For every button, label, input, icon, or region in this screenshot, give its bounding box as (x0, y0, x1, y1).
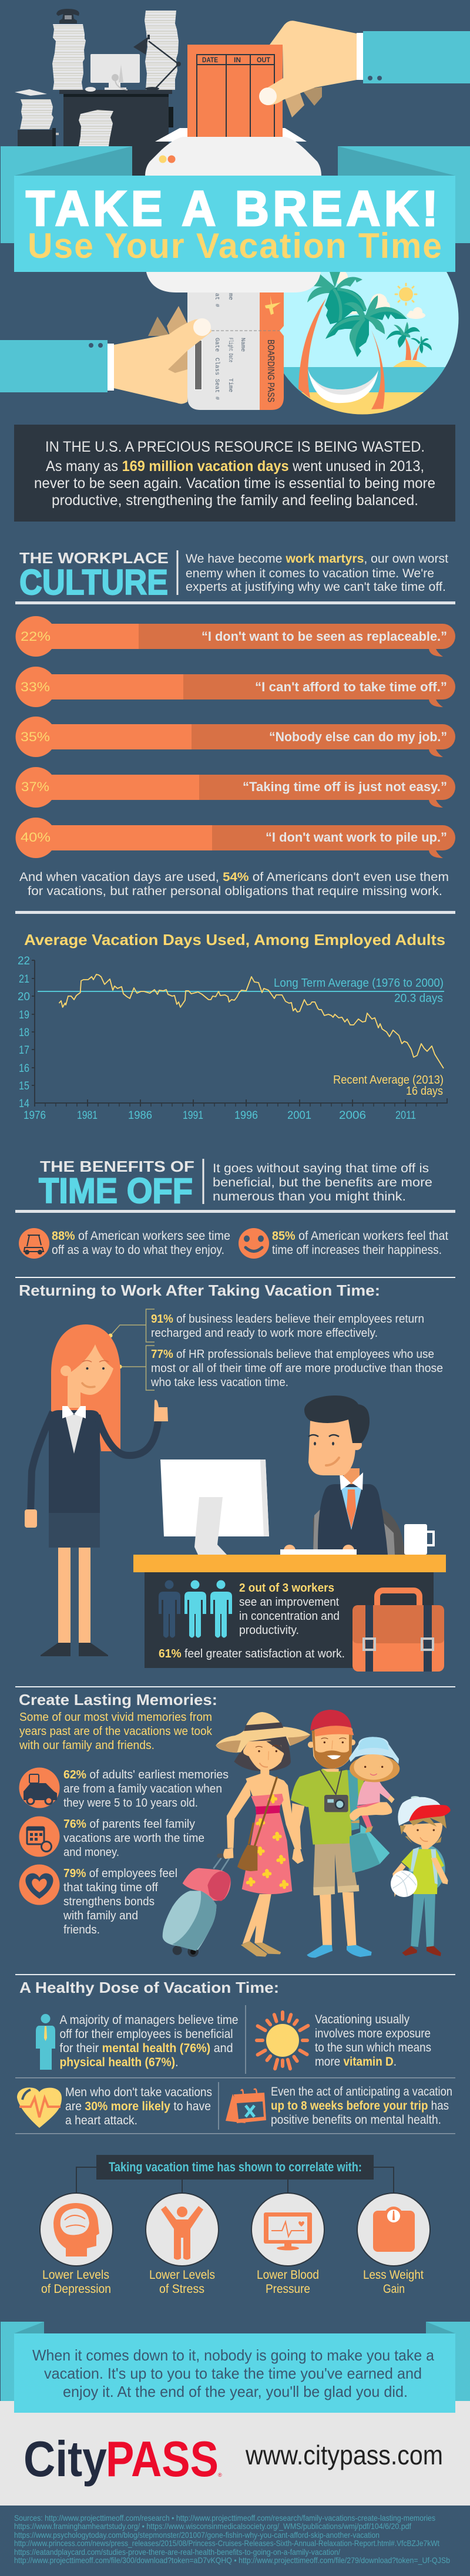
legs (320, 1892, 357, 1947)
closing banner: When it comes down to it, nobody is going to make you take a (32, 2346, 435, 2364)
jacket (49, 1410, 100, 1513)
icon: brain head (40, 2193, 113, 2266)
text: 85 percent (272, 1229, 448, 1257)
hair (304, 1395, 370, 1443)
text: managers: A majority of managers believe time (60, 2013, 239, 2027)
label: stress (149, 2268, 215, 2296)
text: 76 percent: vacations are worth the time (63, 1832, 204, 1845)
text: vitamin D: more vitamin D. (315, 2055, 397, 2069)
x axis labels: 1996 (234, 1109, 258, 1122)
monitor (90, 54, 140, 90)
dress (242, 1794, 292, 1894)
banner folds (1, 2322, 470, 2401)
chair (313, 1505, 405, 1555)
red cap (310, 1710, 354, 1737)
y axis labels: 17 (19, 1044, 29, 1057)
backpack (409, 1845, 445, 1892)
loose paper (15, 89, 47, 96)
text: 91 percent (151, 1313, 424, 1340)
blue hat (349, 1737, 399, 1764)
label: blood pressure: Pressure (266, 2282, 310, 2296)
face (61, 1344, 113, 1395)
text: 91 percent: 91% of business leaders believe their employees return (151, 1313, 424, 1326)
luggage (163, 1854, 234, 1957)
text: vitamin D: Vacationing usually (315, 2013, 409, 2026)
title banner (1, 146, 470, 272)
chest and neck (246, 1769, 285, 1796)
sleeve buttons (89, 343, 103, 348)
fingers behind ticket (148, 306, 187, 336)
icon: worker figures (159, 1580, 232, 1637)
closing banner: enjoy it. At the end of the year, you'll be glad you did. (63, 2383, 408, 2400)
text: 54 percent: for vacations, but rather personal obligations that require missing work. (28, 885, 442, 898)
heading: a healthy dose: A Healthy Dose of Vacation Time: (19, 1979, 279, 1996)
bar: 22 percent: 22% (21, 629, 51, 644)
text: vitamin D: involves more exposure (315, 2027, 431, 2040)
icon: heart rate monitor (251, 2193, 324, 2266)
desk lamp (133, 35, 181, 90)
heading: the benefits of time off: THE BENEFITS OF (40, 1158, 194, 1175)
paper stack front (79, 110, 113, 146)
text: 61 percent: 61% feel greater satisfaction at work. (159, 1647, 345, 1660)
pink top (357, 1780, 391, 1805)
icon: smiley (239, 1228, 269, 1259)
ticket stub (260, 292, 284, 410)
logo: CityPASS (24, 2432, 222, 2487)
icon: calendar (226, 2089, 266, 2123)
text: benefits intro: beneficial, but the benefits are more (213, 1176, 432, 1189)
sleeve (363, 31, 470, 83)
palm tree trunks (298, 298, 385, 409)
hammock (308, 369, 378, 403)
text: 62 percent (63, 1768, 229, 1810)
sun hat (216, 1712, 310, 1753)
x axis labels: 1976 (24, 1109, 46, 1122)
x axis labels: 2011 (395, 1109, 416, 1122)
sky, sea and sand (280, 272, 458, 415)
text: 76 percent: 76% of parents feel family (63, 1818, 195, 1831)
father's near arm (292, 1803, 304, 1849)
text: 77 percent (150, 1348, 443, 1389)
ticket fields: Flight Date (227, 338, 234, 362)
ticket fields: Seat # (213, 379, 220, 400)
text: 77 percent: who take less vacation time. (150, 1376, 288, 1389)
legs (243, 1894, 271, 1944)
text: benefits intro: It goes without saying that time off is (213, 1162, 429, 1175)
label: weight (363, 2268, 424, 2296)
sources (14, 2513, 450, 2565)
y axis labels: 20 (18, 991, 30, 1003)
face (402, 1822, 442, 1849)
panel: intro: productive, strengthening the family and feeling balanced. (52, 492, 418, 509)
panel: intro: As many as 169 million vacation days went unused in 2013, (46, 458, 424, 475)
subtitle: Use Your Vacation Time (28, 226, 443, 265)
heading: returning to work: Returning to Work After Taking Vacation Time: (19, 1282, 380, 1299)
callouts (108, 1309, 443, 1390)
heading: the benefits of time off: TIME OFF (39, 1171, 193, 1210)
y axis labels: 21 (19, 973, 29, 986)
recent average label (333, 1074, 444, 1098)
face (243, 1740, 284, 1771)
text: anticipating: up to 8 weeks before your trip has (271, 2099, 449, 2113)
text: 88 percent (52, 1229, 230, 1257)
text: heart attack: a heart attack. (65, 2114, 137, 2127)
sandals (241, 1941, 281, 1957)
long term label: 20.3 days (394, 992, 443, 1005)
sources: https://www.framinghamheartstudy.org/ • https://www.wisconsinmedicalsociety.org/_WMS/publications/wmj/pdf/104/6/20.pdf (14, 2521, 411, 2531)
x axis labels: 2006 (339, 1109, 366, 1122)
keyboard and hands (280, 1545, 357, 1556)
monitor back (160, 1459, 269, 1555)
ticket fields: me (227, 293, 233, 300)
y axis labels: 19 (19, 1009, 29, 1021)
text: 79 percent: that taking time off (63, 1881, 158, 1894)
ticket fields: Gate (213, 338, 220, 352)
label: weight: Less Weight (363, 2268, 424, 2282)
heading: the workplace culture: THE WORKPLACE (19, 549, 169, 567)
bar: 22 percent: “I don't want to be seen as replaceable.” (202, 629, 447, 644)
shirt and tie (341, 1487, 362, 1530)
text: heart attack (65, 2086, 212, 2127)
text: work martyrs: experts at justifying why we can't take time off. (186, 580, 446, 594)
panel: intro: never to be seen again. Vacation time is essential to being more (34, 475, 435, 492)
father (291, 1710, 390, 1958)
text: 79 percent: 79% of employees feel (63, 1867, 177, 1880)
dress flowers (246, 1794, 288, 1889)
text: work martyrs (186, 552, 448, 594)
printer back (155, 128, 307, 142)
boarding pass label: BOARDING PASS (266, 339, 276, 402)
text: 79 percent: strengthens bonds (63, 1895, 155, 1908)
y axis labels: 14 (19, 1098, 29, 1110)
panel: intro (14, 425, 455, 522)
chart title: Average Vacation Days Used, Among Employed Adults (24, 931, 445, 949)
icon: car (19, 1768, 60, 1808)
coffee mug (404, 1524, 434, 1555)
neck (322, 1769, 339, 1772)
desk (59, 90, 173, 176)
text: 62 percent: 62% of adults' earliest memories (63, 1768, 229, 1781)
curly hair (350, 1756, 400, 1782)
x axis labels: 1991 (183, 1109, 203, 1122)
hair (234, 1737, 291, 1771)
text: anticipating: positive benefits on mental health. (271, 2113, 441, 2127)
tote bag (350, 1825, 390, 1872)
paper stack small (20, 99, 53, 129)
recent average label: 16 days (406, 1085, 443, 1098)
cuff (357, 33, 363, 80)
sources: https://www.psychologytoday.com/blog/stepmonster/201007/gone-fishin-why-you-cant-afford-skip-another-vacation (14, 2530, 380, 2540)
text: 62 percent: are from a family vacation when (63, 1783, 222, 1795)
mother (216, 1712, 310, 1957)
text: 76 percent (63, 1818, 204, 1859)
website url: www.citypass.com (245, 2440, 443, 2470)
ticket fields (213, 293, 246, 400)
arms (227, 1778, 301, 1849)
text: 88 percent: 88% of American workers see time (52, 1229, 230, 1243)
collar (340, 1472, 363, 1490)
ticket fields: at # (213, 293, 220, 307)
text: 79 percent: with family and (63, 1909, 138, 1922)
long term label: Long Term Average (1976 to 2000) (274, 977, 444, 990)
island with small palms (386, 322, 432, 367)
sources: https://eatandplaycard.com/studies-prove-there-are-real-health-benefits-to-going-on-a-family-vacation/ (14, 2547, 340, 2557)
bar: 33 percent (15, 667, 455, 707)
text: 88 percent: off as a way to do what they enjoy. (52, 1243, 224, 1257)
hand (114, 319, 212, 404)
bottom hand (0, 306, 212, 404)
bar: 40 percent (15, 818, 455, 858)
icon: sun (257, 2012, 308, 2069)
pants (411, 1893, 435, 1947)
sleeve buttons (368, 76, 382, 80)
callout brackets (110, 1309, 155, 1390)
shirt (291, 1769, 364, 1845)
text: 2 out of 3 workers: 2 out of 3 workers (239, 1582, 334, 1595)
recent average label: Recent Average (2013) (333, 1074, 444, 1087)
icon: manager (36, 2014, 55, 2070)
long term average line (38, 991, 444, 992)
shoes (41, 1643, 108, 1656)
x axis labels (24, 1109, 416, 1122)
ticket dashes (207, 330, 280, 331)
arms (392, 1858, 448, 1897)
heading: create lasting memories: Create Lasting Memories: (19, 1691, 217, 1709)
text: memories intro: with our family and friends. (19, 1739, 155, 1752)
palm fronds (307, 270, 407, 357)
text: managers: physical health (67%). (60, 2056, 179, 2069)
icon: golf cart (19, 1228, 49, 1259)
boarding pass (187, 292, 284, 410)
text: 54 percent: And when vacation days are used, 54% of Americans don't even use them (19, 870, 449, 884)
bar: 40 percent: 40% (21, 830, 51, 845)
bar: 22 percent (15, 616, 455, 657)
text: benefits intro: numerous than you might think. (213, 1190, 406, 1203)
paper stack right (145, 11, 179, 90)
text: memories intro (19, 1711, 213, 1752)
shirt (65, 1415, 83, 1454)
axes (32, 960, 448, 1107)
bag strap (348, 1770, 360, 1831)
y axis labels (18, 955, 30, 1110)
logo: CityPASS: City (24, 2432, 107, 2487)
time card: OUT (257, 56, 271, 64)
volleyball (391, 1871, 417, 1897)
woman illustration (25, 1324, 168, 1656)
text: 85 percent: time off increases their happiness. (272, 1243, 442, 1257)
white and red cap (398, 1796, 451, 1825)
hand (388, 1795, 395, 1803)
face (308, 1420, 362, 1475)
label: depression (41, 2268, 111, 2296)
label: blood pressure (257, 2268, 319, 2296)
ticket fields: Name (239, 338, 246, 352)
left hand (25, 1509, 37, 1528)
icon: stretching person (146, 2193, 219, 2266)
closing banner: vacation. It's up to you to take the time you've earned and (44, 2365, 422, 2382)
bar: 33 percent: 33% (21, 680, 50, 694)
bar: 37 percent (15, 767, 455, 808)
text: 62 percent: they were 5 to 10 years old. (63, 1797, 198, 1810)
skirt (49, 1513, 100, 1548)
face (354, 1754, 393, 1780)
label: blood pressure: Lower Blood (257, 2268, 319, 2282)
text: work martyrs: We have become work martyrs, our own worst (186, 552, 448, 566)
text: 2 out of 3 workers: in concentration and (239, 1610, 340, 1623)
text: 91 percent: recharged and ready to work more effectively. (151, 1327, 378, 1340)
man illustration (304, 1395, 405, 1555)
jacket (318, 1484, 388, 1555)
time card: DATE (202, 56, 218, 64)
text: 79 percent (63, 1867, 177, 1936)
ticket fields: Class (213, 358, 220, 375)
daughter (349, 1737, 400, 1833)
bar: 37 percent: 37% (21, 779, 49, 794)
camera (320, 1770, 348, 1812)
text: 2 out of 3 workers: productivity. (239, 1624, 299, 1637)
long term label (274, 977, 444, 1005)
office illustration (15, 9, 181, 176)
panel: intro: IN THE U.S. A PRECIOUS RESOURCE IS BEING WASTED. (45, 439, 425, 455)
text: 76 percent: and money. (63, 1846, 119, 1859)
beach scene (280, 272, 458, 415)
label: stress: of Stress (159, 2282, 204, 2296)
icon: suitcase (352, 1590, 444, 1672)
icon: calendar and coin (19, 1816, 60, 1857)
time card: IN (234, 56, 241, 64)
cuff (108, 344, 114, 391)
text: managers: off for their employees is beneficial (60, 2027, 233, 2041)
icon: plane (265, 295, 281, 315)
closing banner (1, 2322, 470, 2413)
sneakers (402, 1946, 441, 1956)
line chart (18, 955, 448, 1122)
bar: 33 percent: “I can't afford to take time off.” (255, 680, 447, 694)
icon: heart with pulse (17, 2087, 62, 2128)
ticket fields: Time (227, 378, 234, 392)
title: TAKE A BREAK! (26, 181, 442, 236)
y axis labels: 16 (19, 1062, 29, 1075)
logo: CityPASS: ® (218, 2472, 222, 2478)
y axis labels: 18 (19, 1027, 29, 1039)
desk (133, 1555, 446, 1668)
text: 2 out of 3 workers (239, 1582, 340, 1637)
legs (58, 1545, 90, 1643)
backpack straps (410, 1847, 438, 1884)
text: 79 percent: friends. (63, 1923, 100, 1936)
bar: 35 percent (15, 717, 455, 757)
hair (51, 1324, 120, 1451)
text: vitamin D: to the sun which means (315, 2041, 431, 2054)
hair (400, 1815, 446, 1843)
family illustration (163, 1710, 451, 1958)
x axis labels: 2001 (287, 1109, 311, 1122)
text: memories intro: years past are of the vacations we took (19, 1725, 213, 1738)
right arm (97, 1415, 158, 1455)
text: vitamin D (315, 2013, 431, 2069)
connectors (76, 2167, 394, 2193)
text: 85 percent: 85% of American workers feel that (272, 1229, 448, 1243)
barcode (194, 340, 202, 390)
mouse (85, 87, 96, 92)
bar: 40 percent: “I don't want work to pile up.” (266, 830, 447, 845)
sleeve (0, 340, 108, 392)
text: managers (60, 2013, 239, 2069)
text: anticipating (271, 2085, 452, 2127)
collar (62, 1406, 86, 1418)
heading: the workplace culture: CULTURE (19, 563, 168, 602)
top hand (259, 21, 470, 105)
icon: telephone (56, 9, 79, 23)
x axis labels: 1986 (128, 1109, 152, 1122)
clouds (334, 270, 425, 319)
label: depression: Lower Levels (42, 2268, 109, 2282)
x axis labels: 1981 (77, 1109, 98, 1122)
text: heart attack: are 30% more likely to have (65, 2100, 211, 2113)
neck (68, 1377, 80, 1408)
banner folds (1, 146, 470, 243)
top hand fingers (283, 51, 322, 117)
neck (344, 1468, 360, 1486)
shoes (307, 1945, 372, 1958)
text: managers: for their mental health (76%) and (60, 2042, 233, 2055)
icon: heart (19, 1864, 60, 1905)
text: 2 out of 3 workers: see an improvement (239, 1596, 339, 1609)
panel: correlate heading: Taking vacation time has shown to correlate with: (109, 2160, 362, 2174)
time card table (197, 55, 274, 137)
shoulder bag (237, 1777, 277, 1871)
left arm (31, 1412, 53, 1513)
logo: CityPASS: PASS (106, 2432, 219, 2487)
footer light band (0, 2401, 470, 2506)
bar: 35 percent: 35% (21, 729, 50, 744)
label: depression: of Depression (41, 2282, 111, 2296)
face and beard (308, 1728, 355, 1769)
shirt (401, 1849, 444, 1894)
text: heart attack: Men who don't take vacations (65, 2086, 212, 2099)
bar: 35 percent: “Nobody else can do my job.” (269, 729, 447, 744)
icon: weighing scale (357, 2193, 430, 2266)
label: weight: Gain (383, 2282, 405, 2296)
printer lights (159, 155, 175, 163)
vacation days line (59, 974, 444, 1068)
text: memories intro: Some of our most vivid memories from (19, 1711, 212, 1724)
bar: 37 percent: “Taking time off is just not easy.” (243, 779, 447, 794)
icon: sun small (395, 284, 417, 305)
hands (223, 1848, 304, 1864)
text: 54 percent (19, 870, 449, 898)
pants and shoes (357, 1802, 380, 1828)
y axis labels: 22 (18, 955, 30, 967)
label: stress: Lower Levels (149, 2268, 215, 2282)
text: benefits intro (213, 1162, 432, 1203)
text: 77 percent: most or all of their time off are more productive than those (151, 1362, 443, 1375)
shorts (313, 1843, 359, 1895)
cabinet (18, 128, 59, 146)
time card (187, 45, 283, 137)
father's arm (350, 1802, 392, 1821)
text: 77 percent: 77% of HR professionals believe that employees who use (151, 1348, 434, 1361)
text: work martyrs: enemy when it comes to vacation time. We're (186, 567, 434, 580)
printer (145, 137, 321, 292)
son (391, 1796, 451, 1956)
y axis labels: 15 (19, 1080, 29, 1092)
thumbs up hand (154, 1400, 168, 1421)
paper stack left (52, 24, 86, 90)
panel: correlate heading (96, 2155, 374, 2180)
